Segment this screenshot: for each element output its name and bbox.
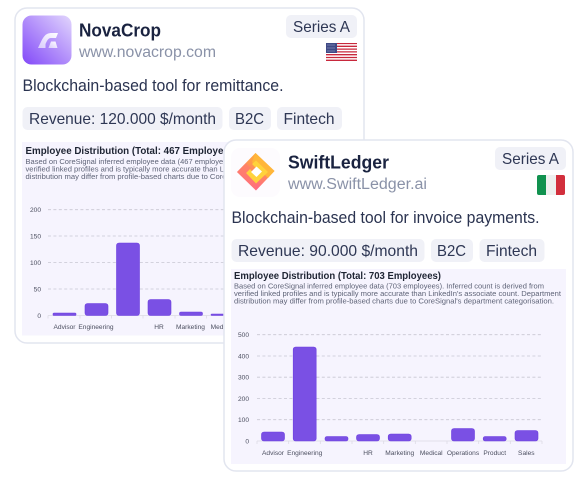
tag: Fintech [480, 239, 544, 262]
chart note: Based on CoreSignal inferred employee data (703 employees). Inferred count is derived from [234, 282, 544, 290]
x axis labels: HR [154, 324, 164, 331]
bars [53, 243, 234, 316]
x axis labels: Engineering [287, 450, 323, 457]
x axis labels: Engineering [78, 324, 114, 331]
x axis labels [262, 450, 535, 457]
icon: Italy flag [537, 175, 565, 195]
tag: Fintech: Fintech [486, 243, 537, 260]
y axis and grid: 150 [30, 234, 41, 240]
tag: B2C: B2C [437, 243, 466, 260]
tag: B2C: B2C [235, 111, 264, 128]
x axis labels [54, 324, 234, 331]
tag: revenue: Revenue: 90.000 $/month [238, 243, 418, 260]
x axis labels: Advisor [262, 450, 285, 457]
badge: Series A: Series A [502, 151, 559, 168]
company name: NovaCrop: NovaCrop [79, 20, 161, 40]
chart note: Based on CoreSignal inferred employee data (467 employees). Inferred count is derived from [26, 157, 336, 166]
y axis and grid: 0 [37, 313, 41, 320]
tag: B2C [229, 107, 271, 130]
tag: revenue: Revenue: 120.000 $/month [29, 111, 216, 128]
y axis and grid: 200 [238, 396, 249, 403]
y axis and grid [30, 207, 333, 320]
x axis labels: Marketing [385, 450, 415, 457]
panel: SwiftLedger card [224, 140, 573, 471]
y axis and grid: 100 [30, 260, 41, 267]
chart note [26, 157, 353, 181]
chart note: verified linked profiles and is typically more accurate than LinkedIn's associate count. Department [26, 164, 353, 174]
icon: SwiftLedger logo [231, 148, 280, 197]
y axis and grid: 300 [238, 374, 249, 382]
x axis labels: Medical [420, 450, 443, 457]
bars [262, 347, 538, 441]
panel: employee distribution chart NovaCrop [22, 142, 357, 336]
y axis and grid: 0 [245, 438, 249, 446]
x axis labels: Advisor [54, 324, 76, 331]
x axis labels: Medical [211, 324, 234, 331]
icon: NovaCrop logo [22, 16, 72, 64]
chart note: distribution may differ from profile-based charts due to CoreSignal's department categorisation. [234, 296, 554, 306]
y axis and grid: 500 [238, 332, 249, 339]
website: SwiftLedger: www.SwiftLedger.ai [287, 176, 427, 193]
y axis and grid: 50 [34, 286, 41, 294]
y axis and grid: 400 [238, 354, 249, 360]
chart note: distribution may differ from profile-based charts due to CoreSignal's department categorisation. [26, 172, 346, 181]
tag: Fintech: Fintech [284, 111, 334, 128]
y axis and grid: 200 [30, 207, 41, 214]
badge: Series A: Series A [293, 19, 350, 36]
chart note: verified linked profiles and is typically more accurate than LinkedIn's associate count. Department [234, 289, 562, 298]
x axis labels: HR [363, 450, 373, 457]
description: Blockchain-based tool for remittance. [22, 77, 284, 95]
x axis labels: Product [483, 450, 506, 457]
y axis and grid: 100 [238, 417, 249, 424]
website: novacrop: www.novacrop.com [78, 44, 216, 61]
badge: Series A [495, 147, 566, 170]
description: Blockchain-based tool for invoice payments. [232, 209, 540, 227]
company name: SwiftLedger: SwiftLedger [288, 152, 389, 172]
y axis and grid [238, 332, 542, 446]
badge: Series A [286, 15, 357, 38]
chart heading: Employee Distribution (Total: 703 Employees) [234, 271, 441, 282]
tag: B2C [431, 239, 473, 262]
x axis labels: Sales [518, 450, 535, 457]
icon: US flag [326, 43, 357, 61]
x axis labels: Marketing [176, 324, 205, 331]
tag: Fintech [277, 107, 342, 130]
panel: employee distribution chart SwiftLedger [231, 269, 566, 464]
panel: NovaCrop card [15, 8, 364, 343]
chart heading: Employee Distribution (Total: 467 Employees) [26, 146, 238, 157]
chart note [234, 282, 562, 306]
x axis labels: Operations [447, 450, 480, 457]
